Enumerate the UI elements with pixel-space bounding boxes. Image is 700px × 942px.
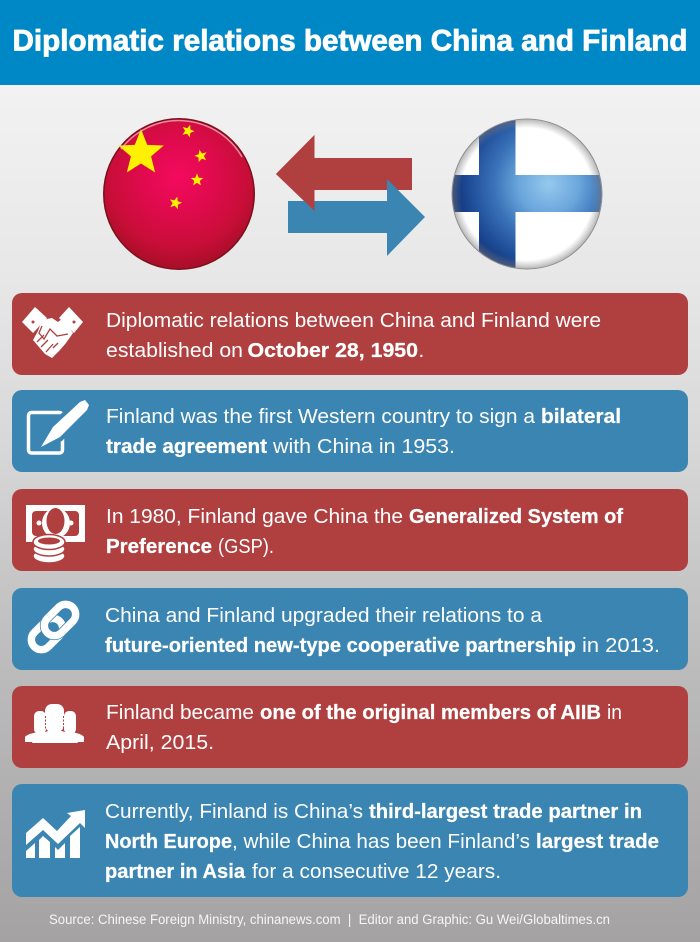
panel: GSP [12,489,688,571]
icon: chain link [27,600,80,654]
title: Diplomatic relations between China and Finland [12,24,688,58]
key phrase: bilateral [541,405,621,428]
text: with China in 1953. [272,435,455,458]
text: in 2013. [582,634,660,657]
key phrase: trade agreement [106,435,267,458]
text: China and Finland upgraded their relations to a [105,604,543,627]
text: Finland was the first Western country to sign a [106,405,536,428]
text: In 1980, Finland gave China the [106,505,403,528]
icon: group of people [25,704,84,743]
key phrase: future-oriented new-type cooperative partnership [105,634,576,657]
icon: pen and paper [28,398,92,453]
panel: partnership [12,588,688,670]
key phrase: Generalized System of [409,505,623,528]
source line: Source: Chinese Foreign Ministry, chinanews.com | Editor and Graphic: Gu Wei/Globaltimes.cn [49,912,610,927]
icon: money and coins [26,505,85,563]
text: Diplomatic relations between China and Finland were [106,309,601,332]
key phrase: largest trade [536,830,659,853]
arrow: China to Finland [288,179,425,256]
text: , while China has been Finland’s [232,830,530,853]
key phrase: one of the original members of AIIB [260,701,601,724]
text: (GSP). [218,535,274,558]
icon: Finland flag [450,118,604,272]
arrow: Finland to China [276,135,412,211]
panel: current status [12,784,688,897]
text: for a consecutive 12 years. [252,860,501,883]
panel: AIIB [12,686,688,768]
icon: handshake [22,307,83,358]
icon: rising bar chart [26,810,85,858]
text: in [607,701,622,724]
text: established on [106,339,243,362]
text: Currently, Finland is China’s [105,800,363,823]
key phrase: third-largest trade partner in [369,800,642,823]
panel: established [12,293,688,375]
text: April, 2015. [106,731,214,754]
key phrase: Preference [106,535,212,558]
panel: established: . [418,339,424,362]
text: Finland became [106,701,254,724]
key date: October 28, 1950 [248,339,418,362]
key phrase: partner in Asia [105,860,246,883]
icon: China flag [103,118,255,270]
panel: trade agreement [12,390,688,472]
header banner [0,0,700,85]
key phrase: North Europe [105,830,232,853]
